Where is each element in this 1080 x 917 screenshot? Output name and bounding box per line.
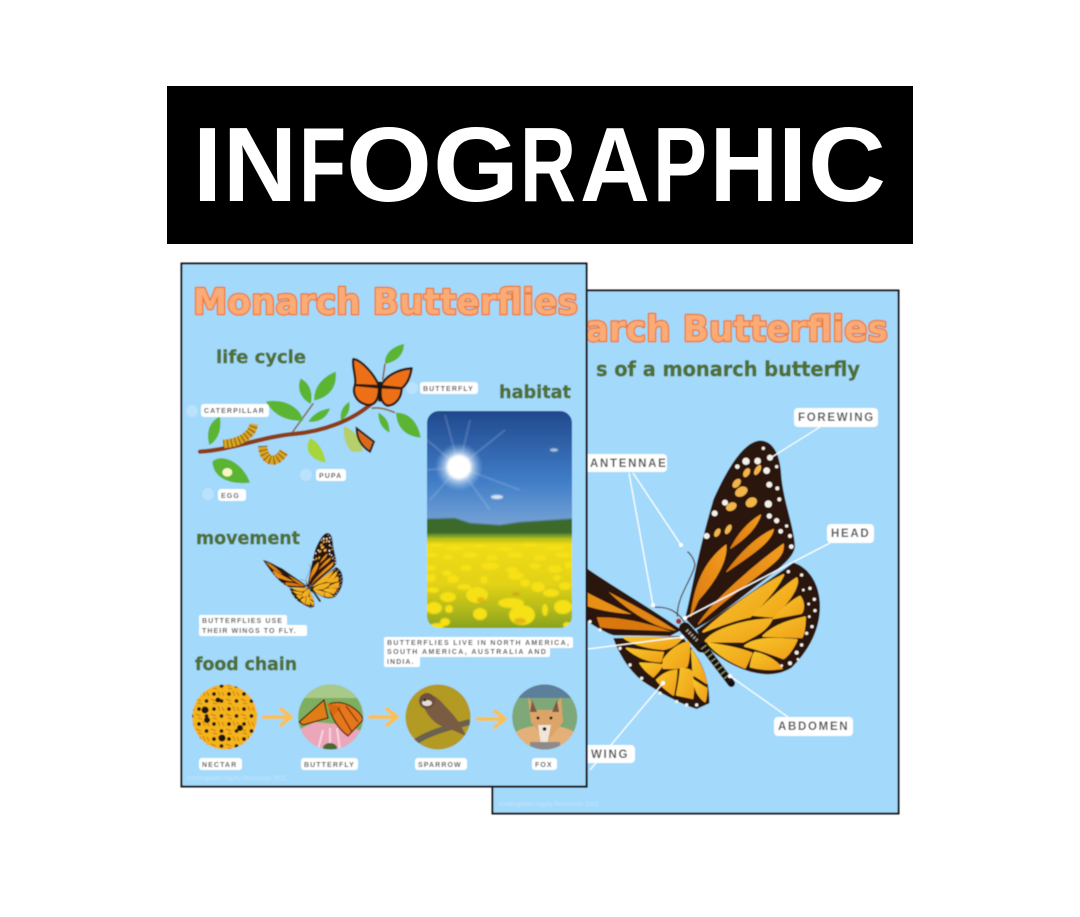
title: G xyxy=(433,106,519,224)
panel: monarch butterflies overview poster xyxy=(182,264,586,786)
label: caterpillar: CATERPILLAR xyxy=(204,408,265,415)
label: caterpillar xyxy=(201,404,269,417)
title: O xyxy=(346,106,432,224)
label: head xyxy=(827,524,874,543)
title: N xyxy=(223,106,297,224)
illustration: life cycle branch xyxy=(200,344,421,483)
text: movement caption: THEIR WINGS TO FLY. xyxy=(202,628,297,635)
label markers xyxy=(186,382,418,500)
credit: Kindergarten Inquiry Resources 2022 xyxy=(499,802,599,808)
photo: sunny sky over flower field xyxy=(426,410,573,629)
panel: parts of a monarch butterfly poster xyxy=(492,290,898,814)
label: nectar xyxy=(199,758,242,770)
food chain: sparrow xyxy=(405,684,471,750)
label: antennae: ANTENNAE xyxy=(590,458,668,470)
poster title: Monarch Butterflies xyxy=(193,282,578,323)
label: butterfly: BUTTERFLY xyxy=(423,386,474,393)
heading: parts of a monarch butterfly: part xyxy=(530,357,577,381)
arrow xyxy=(264,709,291,725)
arrow xyxy=(478,711,505,727)
label: butterfly xyxy=(420,382,478,394)
title banner xyxy=(167,86,913,244)
label: forewing: FOREWING xyxy=(798,412,875,424)
label: butterfly: BUTTERFLY xyxy=(304,762,355,769)
title: A xyxy=(580,106,650,224)
label: nectar: NECTAR xyxy=(202,762,237,769)
title: R xyxy=(520,106,576,224)
heading: food chain: food chain xyxy=(195,654,297,675)
title: I xyxy=(193,106,222,224)
label: wing: WING xyxy=(591,749,629,761)
text: habitat caption: INDIA. xyxy=(387,659,415,666)
label: head: HEAD xyxy=(831,528,870,540)
credit: Kindergarten Inquiry Resources 2022 xyxy=(187,776,287,782)
food chain: nectar xyxy=(190,682,260,752)
poster title: Monarch Butterflies xyxy=(503,309,888,350)
label: egg xyxy=(218,489,246,501)
callout lines xyxy=(588,427,830,770)
label: pupa: PUPA xyxy=(319,473,342,480)
title: I xyxy=(778,106,807,224)
text: movement caption: BUTTERFLIES USE xyxy=(202,618,283,625)
label: antennae xyxy=(580,454,668,472)
label: egg: EGG xyxy=(221,493,240,500)
illustration: butterfly in flight xyxy=(263,533,343,608)
label: sparrow xyxy=(415,758,467,770)
title: C xyxy=(808,106,886,224)
label: fox xyxy=(532,758,557,770)
label: forewing xyxy=(794,408,878,427)
label: butterfly xyxy=(301,758,358,770)
heading: life cycle: life cycle xyxy=(216,347,306,368)
label: wing xyxy=(580,745,635,763)
label: abdomen xyxy=(774,717,853,736)
label: sparrow: SPARROW xyxy=(418,762,462,769)
title: H xyxy=(710,106,778,224)
title: F xyxy=(299,106,346,224)
food chain: fox xyxy=(512,684,578,751)
text: habitat caption: SOUTH AMERICA, AUSTRALIA AND xyxy=(387,649,547,656)
text: habitat caption xyxy=(384,637,573,667)
label: pupa xyxy=(316,469,346,481)
heading: movement: movement xyxy=(196,528,300,549)
label: abdomen: ABDOMEN xyxy=(778,721,849,733)
heading: parts of a monarch butterfly: s of a monarch butterfly xyxy=(596,357,860,381)
food chain: butterfly on flower xyxy=(298,684,364,753)
title: P xyxy=(653,106,707,224)
arrow xyxy=(370,709,397,725)
text: habitat caption: BUTTERFLIES LIVE IN NORTH AMERICA, xyxy=(387,640,570,647)
label: fox: FOX xyxy=(535,762,553,769)
illustration: large monarch butterfly xyxy=(511,441,820,709)
heading: habitat: habitat xyxy=(499,382,571,403)
text: movement caption xyxy=(199,615,307,636)
